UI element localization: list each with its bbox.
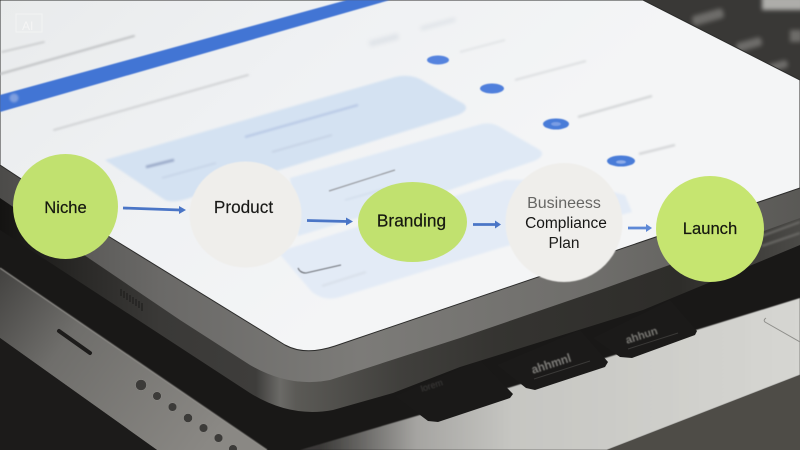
step 5: Launch xyxy=(656,176,764,282)
key: middle xyxy=(497,330,608,390)
step 1: Niche xyxy=(13,154,118,259)
bullet 1 xyxy=(427,40,505,64)
bullet 2 xyxy=(480,61,586,94)
arrow: Product to Branding xyxy=(307,218,353,226)
key: right: ahhun xyxy=(624,325,660,347)
watermark logo xyxy=(16,14,42,33)
trackpad corner xyxy=(764,318,800,342)
step 3: Branding: Branding xyxy=(377,210,446,230)
step 3: Branding xyxy=(358,182,467,262)
bezel right highlights xyxy=(762,222,800,246)
step 1: Niche: Niche xyxy=(44,198,87,217)
bullet 3 xyxy=(543,96,652,130)
keyboard top right, blurred xyxy=(640,0,800,85)
screen title, blurred xyxy=(0,36,248,130)
arrow: Niche to Product xyxy=(123,206,186,214)
laptop side wall xyxy=(0,268,267,450)
blue progress bar xyxy=(0,0,390,112)
tablet bezel top face xyxy=(0,160,800,382)
key buttons row xyxy=(395,300,697,422)
step 4: Business Compliance Plan: Plan xyxy=(548,235,580,252)
arrow: Business Plan to Launch xyxy=(628,224,652,232)
card 2 xyxy=(290,123,542,236)
step 4: Business Compliance Plan: Compliance xyxy=(525,215,607,232)
card 3 xyxy=(278,180,632,299)
speaker grille xyxy=(121,289,142,311)
card 1 xyxy=(105,76,466,201)
icon: port dots xyxy=(136,380,237,450)
step 5: Launch: Launch xyxy=(683,219,737,238)
keyboard base xyxy=(300,298,800,450)
tablet bezel front edge xyxy=(0,190,800,412)
step 2: Product: Product xyxy=(214,197,273,217)
key: left xyxy=(395,360,513,422)
arrow: Branding to Business Plan xyxy=(473,220,501,228)
key: left: lorem xyxy=(420,377,444,394)
icon: side slot xyxy=(59,331,90,353)
key: middle: ahhmnl xyxy=(530,353,573,377)
step 4: Business Compliance Plan: Busineess xyxy=(527,195,601,212)
bullet 4 xyxy=(607,145,675,166)
step 4: Business Compliance Plan xyxy=(506,163,622,282)
top small blurred marks xyxy=(369,17,456,47)
step 2: Product xyxy=(190,162,302,268)
base right lower edge xyxy=(607,375,800,450)
key: right xyxy=(593,300,697,358)
watermark logo: AI xyxy=(22,19,33,33)
list bullets xyxy=(427,40,675,166)
panel: tablet screen xyxy=(0,0,800,351)
